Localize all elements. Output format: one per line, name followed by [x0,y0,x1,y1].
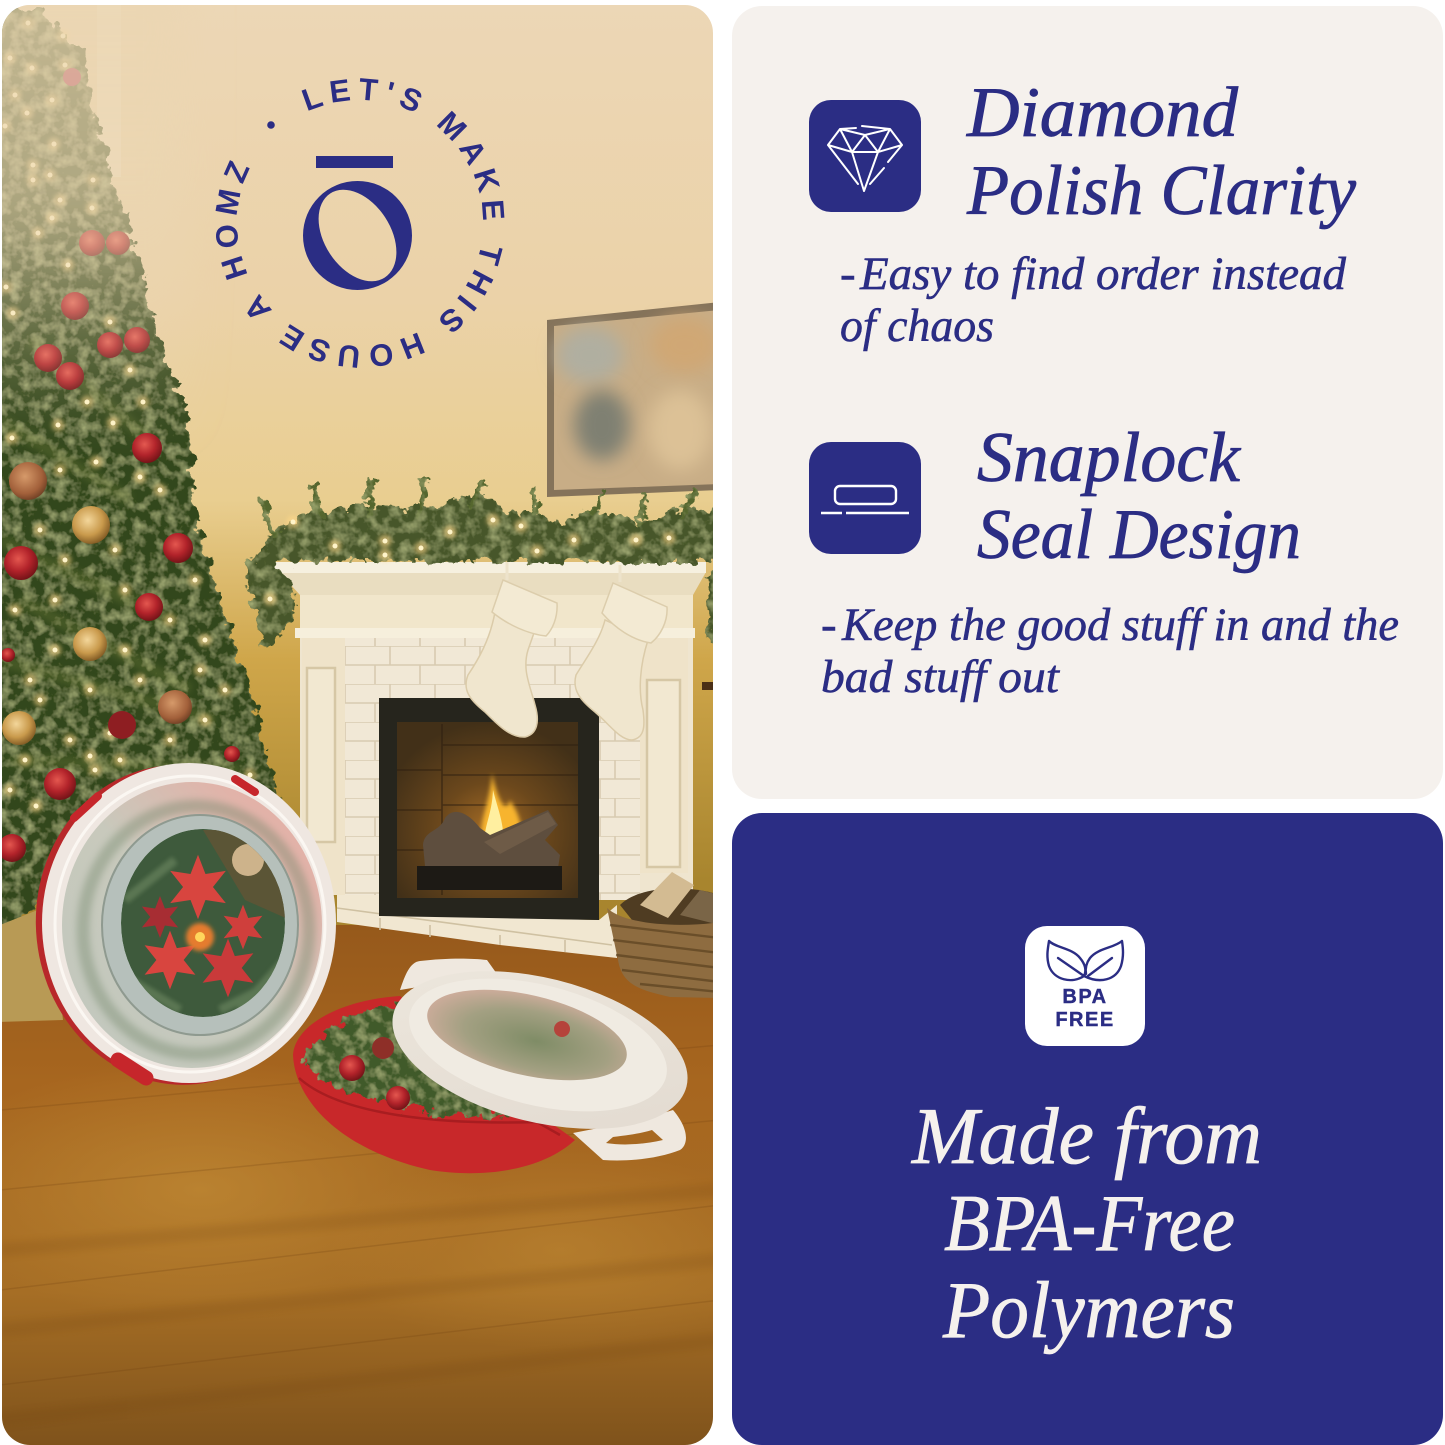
circular slogan: LET'S MAKE THIS HOUSE A HOMZ [216,78,504,368]
macron bar [316,156,393,168]
logo: brand badge [216,78,504,368]
floor [0,925,790,1445]
flame [479,774,522,832]
separator dot [267,121,275,129]
panel: features [732,6,1443,799]
wall column [97,5,121,177]
heading: diamond polish clarity: Diamond [966,74,1239,152]
panel: fireplace photo [2,5,713,1445]
icon: snaplock [809,442,921,554]
lid [392,971,688,1129]
text: keep the good stuff: - [821,599,837,651]
panel: BPA free [732,813,1443,1445]
heading: snaplock seal design [977,419,1301,574]
wreath container: open with lid [293,944,704,1173]
heading: made from BPA-free polymers: Polymers [942,1267,1235,1355]
icon: BPA free leaves: FREE [1055,1009,1115,1031]
clear lid rim [42,763,336,1083]
garland lights [270,520,669,599]
mantel garland [245,480,720,650]
christmas tree [0,10,278,1022]
silver ring [102,815,298,1035]
icon: BPA free leaves [1025,926,1145,1046]
stocking left [466,562,620,737]
text: easy to find order: Easy to find order instead [859,248,1346,300]
fireplace [270,562,714,958]
heading: made from BPA-free polymers: BPA-Free [944,1180,1235,1268]
icon: diamond [809,100,921,212]
stockings [466,562,667,740]
text: easy to find order: - [840,248,856,300]
letter o mark [303,181,412,290]
red base [36,766,224,1085]
top handle [400,959,497,990]
bottom handle [573,1110,686,1161]
red base [293,996,575,1173]
heading: made from BPA-free polymers: Made from [911,1093,1262,1181]
firebox [379,698,599,920]
wreath container: standing [36,763,336,1086]
text: easy to find order: of chaos [840,300,994,352]
logs [423,810,560,868]
stocking right [575,583,667,740]
text: keep the good stuff [821,599,1399,703]
wicker basket with logs [607,872,720,998]
text: keep the good stuff: Keep the good stuff in and the [841,599,1399,651]
tree skirt [0,905,63,1022]
wall [0,0,720,1000]
text: easy to find order [840,248,1346,352]
wreath in base [305,1003,507,1118]
frosted band [62,782,322,1068]
heading: snaplock seal design: Seal Design [977,496,1301,574]
icon: BPA free leaves: BPA [1062,986,1108,1008]
heading: diamond polish clarity: Polish Clarity [966,152,1356,230]
wreath window [121,829,290,1017]
ornaments [0,68,240,862]
heading: diamond polish clarity [966,74,1356,230]
text: keep the good stuff: bad stuff out [821,651,1060,703]
heading: made from BPA-free polymers [911,1093,1262,1355]
top haze [0,0,190,440]
painting [547,302,720,497]
tree lights [5,23,250,806]
red clips [74,779,255,818]
heading: snaplock seal design: Snaplock [977,419,1241,497]
